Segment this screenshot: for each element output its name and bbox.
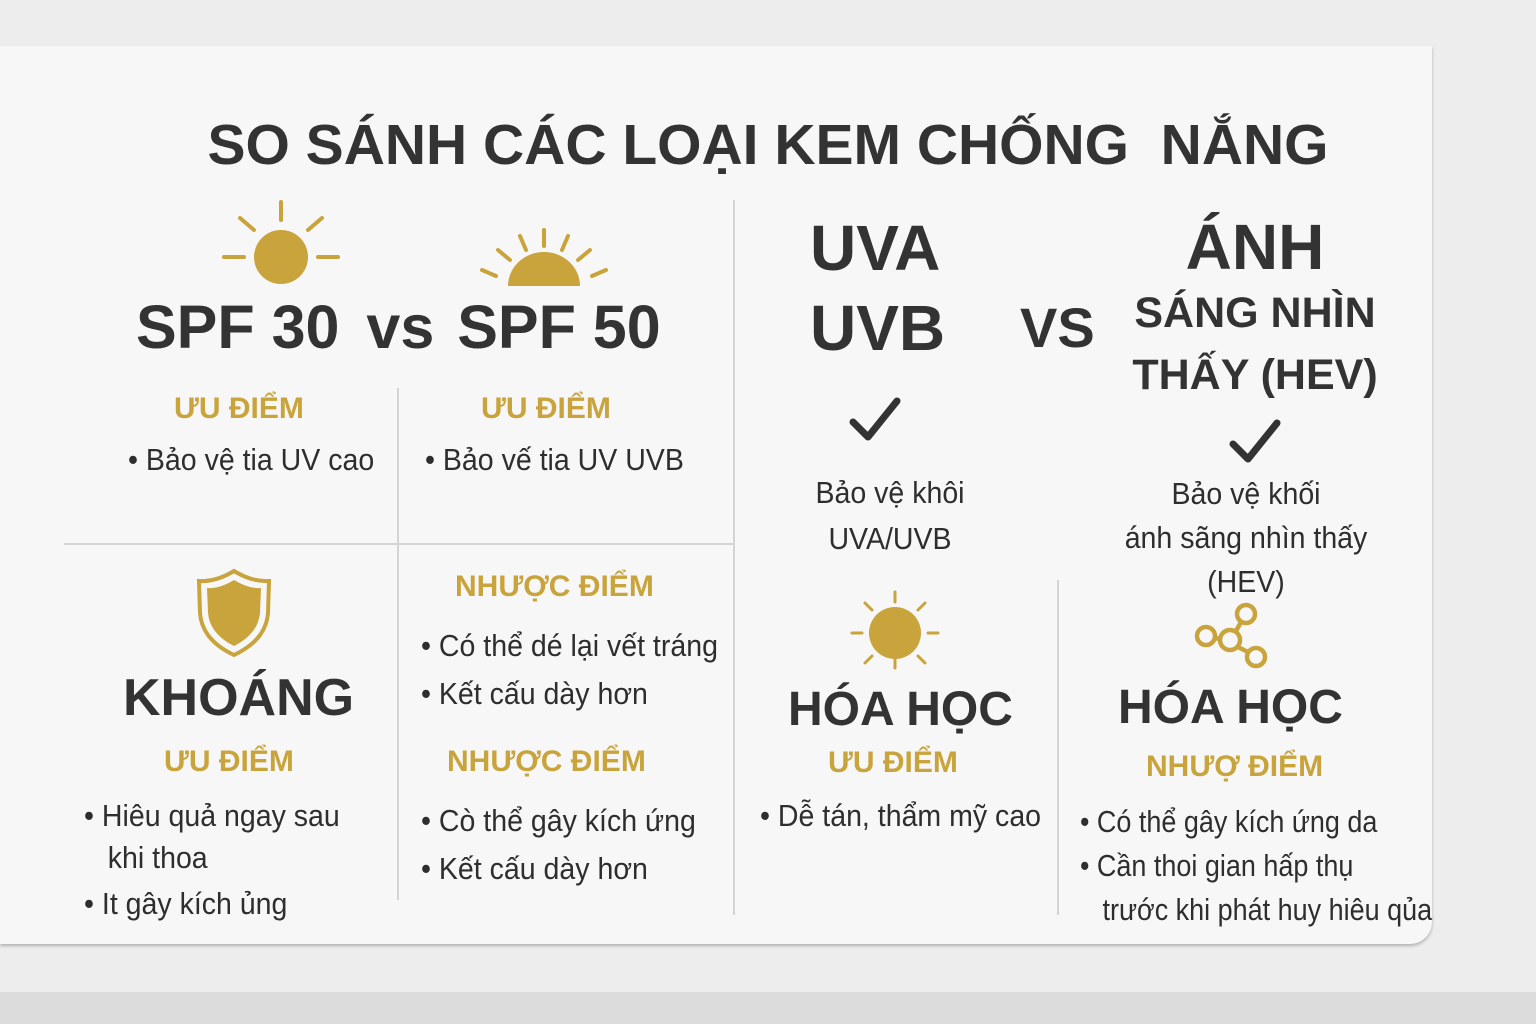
- icon: check HEV: [1230, 420, 1280, 462]
- bullet: • Dễ tán, thẩm mỹ cao: [760, 798, 1041, 833]
- text UVA protect: [815, 475, 965, 556]
- bullets: • Có thể dé lại vết tráng: [421, 628, 718, 663]
- bullets: • It gây kích ủng: [84, 886, 287, 921]
- SPF30 pros: [128, 392, 374, 477]
- bullets: [421, 803, 696, 886]
- cons 1: [421, 570, 718, 711]
- label: ƯU ĐIỂM: [174, 392, 304, 425]
- bullets: • Cần thoi gian hấp thụ: [1080, 848, 1353, 883]
- text HEV protect: [1125, 476, 1368, 599]
- heading: ANH sang nhin thay: THẤY (HEV): [1132, 351, 1378, 399]
- bullet: • Bảo vệ tia UV cao: [128, 442, 374, 477]
- label: ƯU ĐIỂM: [164, 745, 294, 778]
- label: NHƯỢC ĐIỂM: [447, 745, 646, 778]
- heading: ANH sang nhin thay: ÁNH: [1186, 211, 1324, 283]
- label: ƯU ĐIỂM: [828, 746, 958, 779]
- bullets: • Cò thể gây kích ứng: [421, 803, 696, 838]
- heading: SPF 30 vs SPF 50: SPF 30 vs SPF 50: [136, 293, 661, 361]
- bullets: [421, 628, 718, 711]
- bullets: • Có thể gây kích ứng da: [1080, 804, 1377, 839]
- chemical cons: [1080, 750, 1432, 927]
- bullets: khi thoa: [108, 840, 208, 875]
- cons 2: [421, 744, 696, 886]
- bullets: trước khi phát huy hiêu qủa: [1102, 892, 1432, 927]
- text UVA protect: Bảo vệ khôi: [815, 475, 965, 510]
- icon: half sun: [480, 228, 608, 286]
- text HEV protect: (HEV): [1207, 564, 1285, 599]
- heading: UVA UVB: [810, 212, 945, 364]
- heading: ANH sang nhin thay: SÁNG NHÌN: [1134, 289, 1376, 337]
- bullet: • Bảo vế tia UV UVB: [425, 442, 684, 477]
- icon: check UVA: [850, 398, 900, 440]
- icon: molecule: [1194, 602, 1268, 668]
- icon: shield: [196, 568, 272, 658]
- SPF50 pros: [425, 392, 684, 477]
- label: NHƯỢ ĐIỂM: [1146, 750, 1323, 783]
- mineral pros: [84, 744, 340, 921]
- text HEV protect: Bảo vệ khối: [1171, 476, 1321, 511]
- bullets: [1080, 804, 1432, 927]
- bullets: • Hiêu quả ngay sau: [84, 798, 340, 833]
- heading: HOA HOC 2: HÓA HỌC: [1118, 681, 1343, 734]
- icon: small sun: [850, 590, 940, 670]
- background band: [0, 992, 1536, 1024]
- title: SO SÁNH CÁC LOẠI KEM CHỐNG NẮNG: [207, 113, 1329, 177]
- heading: HOA HOC 1: HÓA HỌC: [788, 683, 1013, 736]
- chemical pros: [760, 746, 1041, 833]
- text UVA protect: UVA/UVB: [828, 521, 952, 556]
- label: NHƯỢC ĐIỂM: [455, 570, 654, 603]
- text HEV protect: ánh sãng nhìn thấy: [1125, 520, 1367, 555]
- heading: KHOÁNG: KHOÁNG: [123, 669, 354, 727]
- bullets: • Kết cấu dày hơn: [421, 851, 648, 886]
- bullets: • Kết cấu dày hơn: [421, 676, 648, 711]
- label: ƯU ĐIỂM: [481, 392, 611, 425]
- bullets: [84, 798, 340, 921]
- heading: UVA UVB: UVB: [810, 292, 945, 364]
- VS: VS: [1020, 296, 1095, 359]
- heading: UVA UVB: UVA: [810, 212, 940, 284]
- heading: ANH sang nhin thay: [1132, 211, 1378, 399]
- icon: sun: [222, 200, 340, 284]
